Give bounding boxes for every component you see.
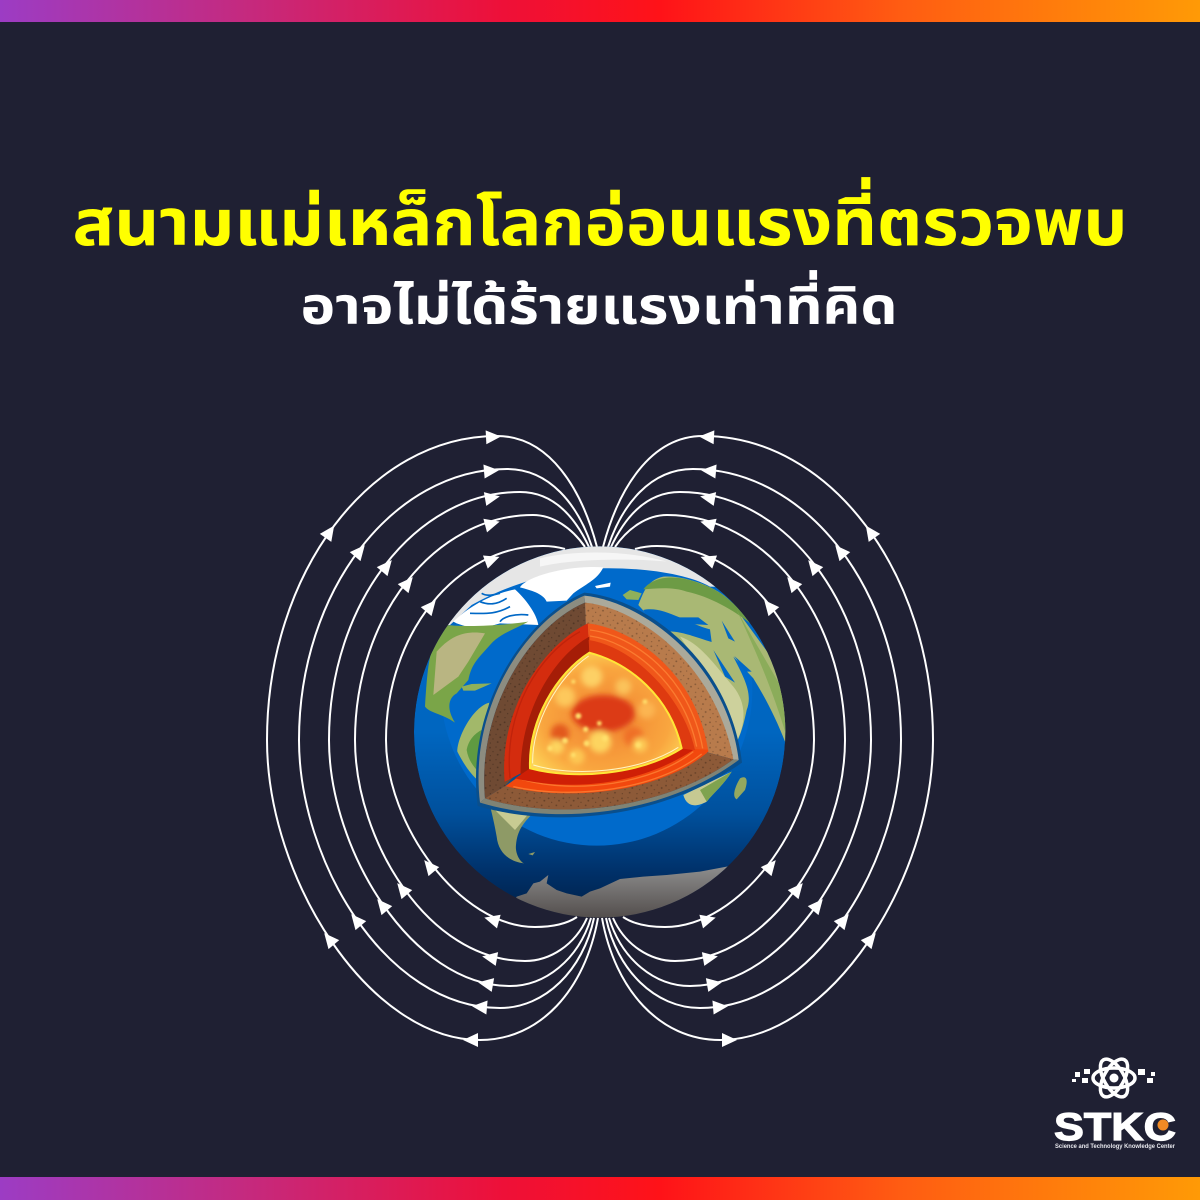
mantle: right face [585, 603, 733, 759]
persian gulf [734, 656, 752, 672]
caribbean islands [462, 683, 492, 691]
crust: upper right [584, 596, 739, 760]
south america north [457, 703, 489, 782]
crust: bottom [480, 759, 739, 814]
outer core [504, 624, 708, 794]
madagascar [734, 777, 747, 799]
pale africa [680, 637, 744, 745]
falkland island [528, 852, 535, 855]
outer core banding [513, 630, 703, 792]
red sea [713, 650, 735, 683]
title: สนามแม่เหล็กโลกอ่อนแรงที่ตรวจพบ [72, 177, 1128, 259]
outer core: bottom face [506, 748, 708, 794]
inner core [530, 653, 682, 774]
deeper outer core right [589, 640, 695, 750]
eurasia and africa [638, 576, 786, 742]
wedge outline [476, 593, 742, 817]
logo tagline: Science and Technology Knowledge Center [1055, 1144, 1176, 1150]
globe [414, 546, 786, 918]
africa south [683, 772, 732, 805]
greenland ice [520, 567, 603, 602]
outer core: right face [588, 624, 708, 754]
top gradient bar [0, 0, 1200, 22]
north america interior [433, 632, 485, 695]
western europe [623, 590, 642, 600]
left face shading [509, 632, 580, 778]
small ice floe [595, 583, 611, 588]
earth with cut-away [414, 546, 786, 918]
magnetic field lines: right side [602, 430, 933, 1047]
bottom gradient bar [0, 1177, 1200, 1200]
arctic islands [453, 589, 538, 630]
polar ice cap [448, 546, 716, 626]
black sea [678, 617, 708, 625]
caspian sea [722, 621, 735, 642]
polar cap highlight [540, 552, 667, 567]
mediterranean [643, 609, 712, 642]
lighter ocean disc [441, 534, 752, 846]
logo orange dot [1158, 1120, 1168, 1130]
logo atom icon [1093, 1055, 1135, 1101]
south america green [467, 730, 482, 773]
crust: left [478, 596, 585, 803]
magnetic field lines: left side [267, 430, 598, 1047]
mantle: left face [484, 603, 588, 798]
africa south green [700, 772, 732, 802]
limb forest [737, 610, 787, 737]
core rim highlight [533, 656, 678, 771]
logo wordmark: STKC [1054, 1106, 1176, 1149]
subtitle: อาจไม่ได้ร้ายแรงเท่าที่คิด [300, 270, 898, 336]
north america [425, 622, 528, 723]
deeper outer core bottom [515, 748, 693, 785]
deeper outer core left [521, 637, 589, 778]
earth cross-section wedge [476, 593, 742, 817]
STKC logo [1054, 1055, 1176, 1150]
outer core: left face [504, 624, 588, 782]
inner core magma [549, 666, 655, 765]
south america south [491, 808, 533, 863]
core highlights [547, 680, 647, 757]
northern forest [643, 577, 750, 623]
mantle: bottom face [485, 753, 733, 809]
logo pixel squares [1072, 1069, 1155, 1083]
andes highlight [495, 810, 528, 830]
channels between arctic islands [470, 593, 528, 622]
antarctica [516, 866, 728, 918]
ocean [414, 546, 785, 918]
